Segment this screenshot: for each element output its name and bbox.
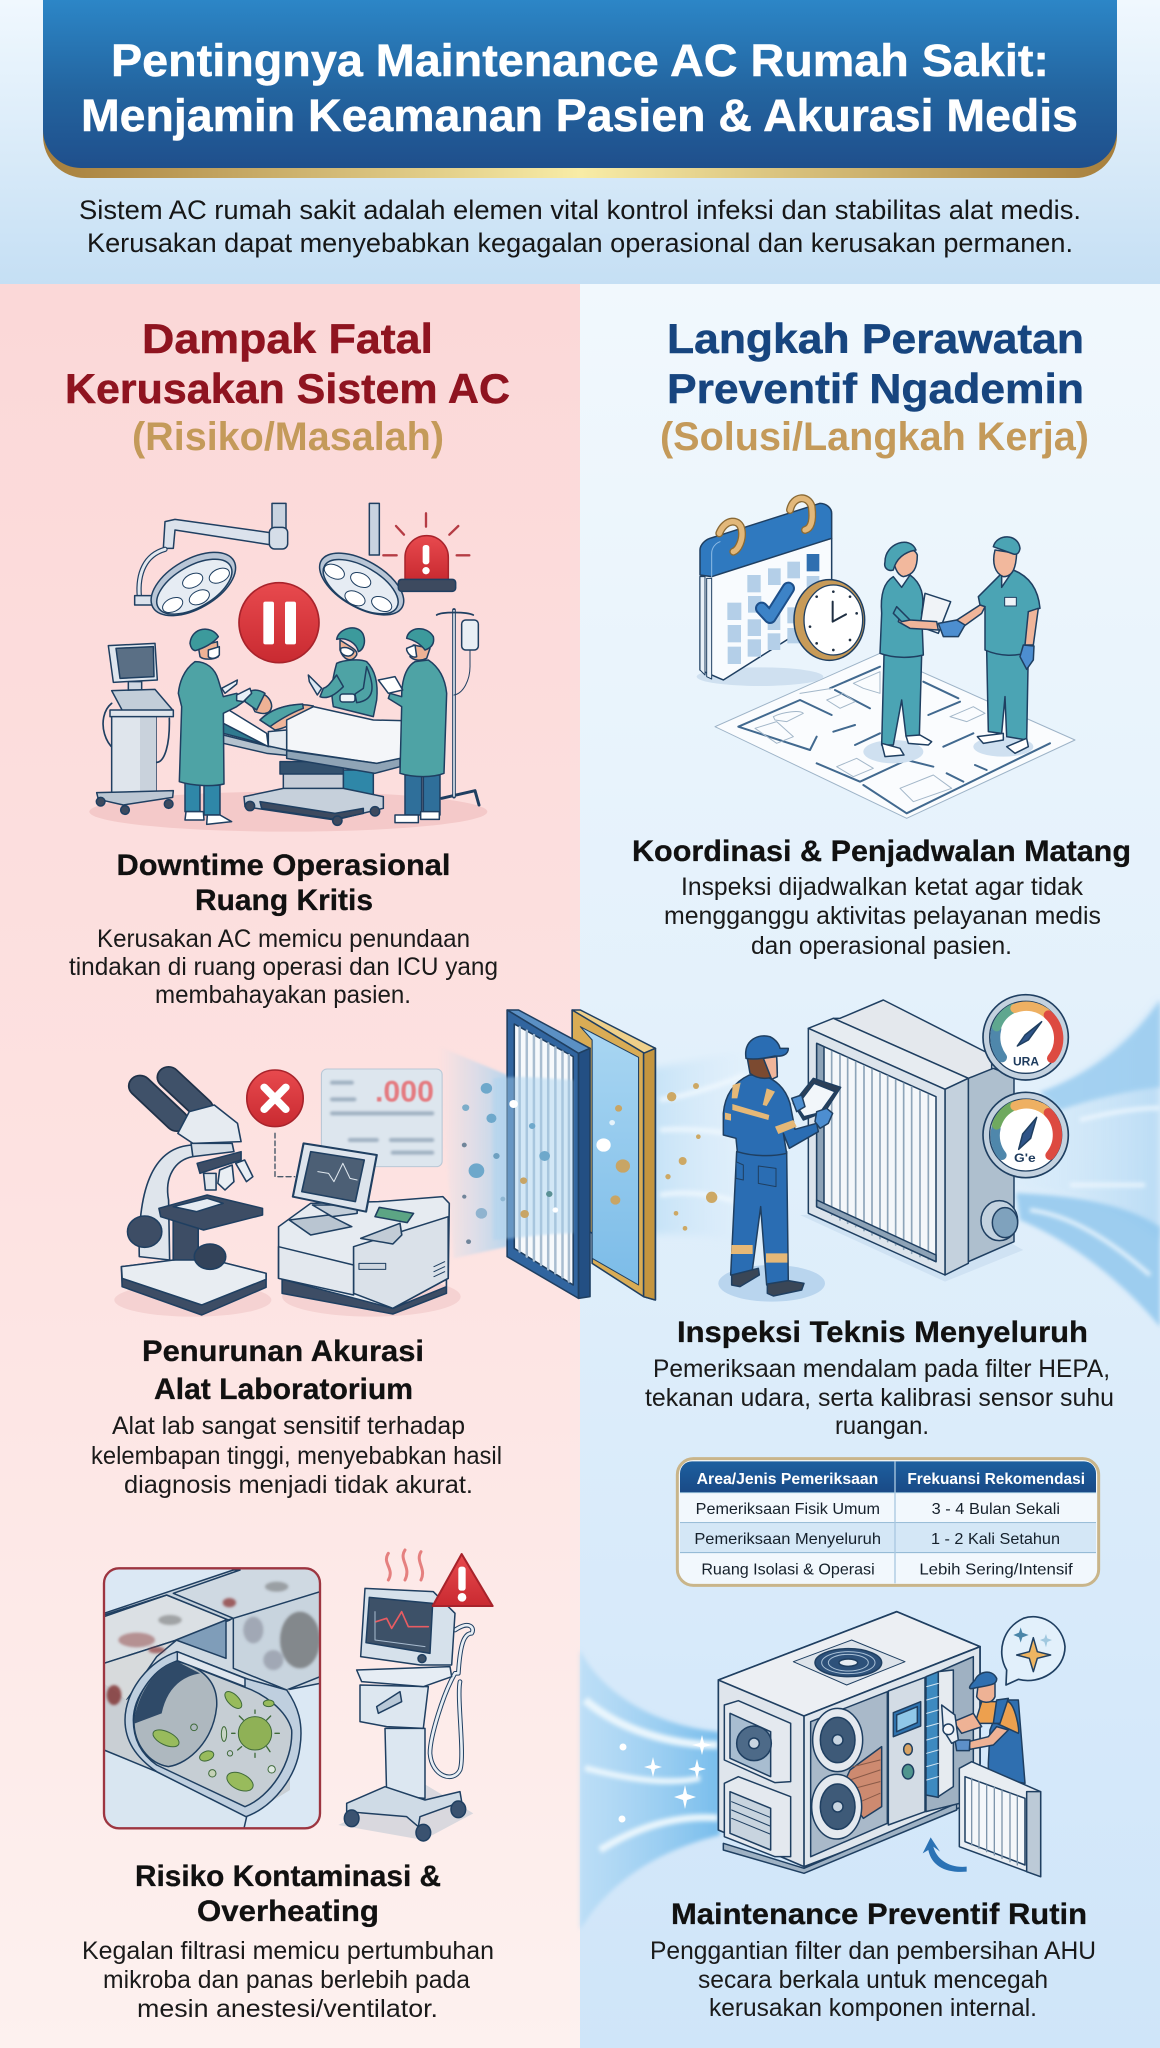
blue filter: [507, 1010, 590, 1053]
text: koordinasi: mengganggu aktivitas pelayanan medis: [664, 902, 1101, 930]
illustration: contaminated duct and overheating ventilator: [104, 1550, 493, 1841]
text: penurunan akurasi: Alat lab sangat sensitif terhadap: [112, 1412, 465, 1440]
particles: [462, 1083, 630, 1244]
AHU body: [718, 1612, 980, 1867]
illustration: microscope and lab analyzer: [114, 1069, 461, 1317]
gauges: URA: [1013, 1054, 1039, 1068]
heat waves: [386, 1550, 423, 1580]
clock: [794, 580, 865, 660]
table: frekuensi pemeriksaan: Frekuansi Rekomendasi: [907, 1471, 1085, 1488]
microscope: [121, 1257, 266, 1315]
IV stand: [442, 791, 479, 805]
illustration: central HEPA filters with particles: [439, 1010, 655, 1300]
right lamp: [369, 503, 379, 555]
alarm: [405, 536, 448, 580]
replace arrow: [923, 1837, 967, 1872]
text: downtime operasional: membahayakan pasien.: [155, 981, 411, 1009]
panel: langkah perawatan: [580, 284, 1160, 2048]
airflow swooshes: [580, 1000, 1160, 1930]
text: inspeksi teknis: ruangan.: [835, 1412, 929, 1440]
HEPA housing: [833, 1000, 992, 1078]
text: maintenance preventif: Maintenance Preventif Rutin: [671, 1898, 1087, 1931]
calendar: [697, 667, 823, 686]
surgeon center: [343, 770, 373, 795]
header background: [0, 0, 1160, 284]
text: penurunan akurasi: Alat Laboratorium: [154, 1373, 413, 1406]
heading: langkah perawatan: (Solusi/Langkah Kerja): [660, 415, 1089, 459]
table: frekuensi pemeriksaan: 1 - 2 Kali Setahun: [931, 1531, 1060, 1548]
text: risiko kontaminasi: mesin anestesi/ventilator.: [137, 1995, 438, 2023]
text: penurunan akurasi: [91, 1335, 502, 1499]
text: inspeksi teknis: Pemeriksaan mendalam pada filter HEPA,: [653, 1355, 1110, 1383]
text: koordinasi: [632, 835, 1131, 960]
control panel: [888, 1677, 925, 1825]
staff shadows: [863, 740, 923, 763]
illustration: scheduling and coordination: [697, 498, 1075, 818]
text: risiko kontaminasi: [82, 1860, 494, 2023]
patient: [247, 693, 272, 714]
text: risiko kontaminasi: mikroba dan panas berlebih pada: [103, 1966, 470, 1994]
worker: [988, 1700, 1025, 1783]
intro text: [79, 195, 1081, 258]
text: penurunan akurasi: Penurunan Akurasi: [142, 1335, 424, 1368]
heading: dampak fatal: [65, 315, 510, 459]
text: koordinasi: Inspeksi dijadwalkan ketat agar tidak: [681, 873, 1083, 901]
interior: [811, 1692, 887, 1857]
monitor: [312, 1205, 357, 1217]
text: koordinasi: dan operasional pasien.: [751, 932, 1012, 960]
table: frekuensi pemeriksaan: Area/Jenis Pemeriksaan: [697, 1471, 878, 1488]
gauges: [983, 995, 1068, 1080]
particles: [665, 1083, 717, 1231]
heading: dampak fatal: (Risiko/Masalah): [132, 415, 444, 459]
blurred results panel: .000: [375, 1076, 434, 1108]
table: frekuensi pemeriksaan: Lebih Sering/Intensif: [919, 1562, 1073, 1579]
replacement filter: [959, 1762, 1041, 1877]
duct card: [104, 1568, 320, 1828]
floor plan: [715, 653, 1075, 818]
side vents: [724, 1701, 791, 1783]
table: frekuensi pemeriksaan: [677, 1459, 1099, 1585]
gold filter: [572, 1010, 655, 1300]
illustration: operating room with pause: [89, 503, 487, 832]
doctor: [987, 650, 1028, 740]
X icon: [275, 1133, 295, 1177]
heading: langkah perawatan: Preventif Ngademin: [667, 365, 1084, 412]
text: inspeksi teknis: Inspeksi Teknis Menyeluruh: [677, 1316, 1088, 1349]
heading: dampak fatal: Kerusakan Sistem AC: [65, 365, 510, 412]
text: downtime operasional: Kerusakan AC memicu penundaan: [97, 925, 470, 953]
illustration: technician inspecting HEPA unit: G'e: [1014, 1151, 1036, 1165]
microbes: [150, 1689, 275, 1795]
text: downtime operasional: tindakan di ruang operasi dan ICU yang: [69, 953, 498, 981]
text: risiko kontaminasi: Overheating: [197, 1895, 379, 1928]
bed: [283, 773, 343, 797]
speech bubble: [1002, 1617, 1065, 1685]
anesthesia machine: [103, 703, 140, 755]
table: frekuensi pemeriksaan: Pemeriksaan Menyeluruh: [694, 1531, 881, 1548]
technician: [731, 1152, 788, 1285]
intro text: Kerusakan dapat menyebabkan kegagalan operasional dan kerusakan permanen.: [87, 228, 1073, 258]
panel: dampak fatal: [0, 284, 580, 2048]
heading: dampak fatal: Dampak Fatal: [142, 315, 433, 362]
pause icon: [239, 583, 319, 663]
left lamp arm: [272, 503, 286, 530]
surgeon right: [405, 775, 440, 815]
text: maintenance preventif: Penggantian filter dan pembersihan AHU: [650, 1937, 1096, 1965]
duct port: [981, 1201, 1018, 1241]
text: downtime operasional: Ruang Kritis: [195, 884, 373, 917]
roof fan: [793, 1640, 905, 1685]
heading: langkah perawatan: [660, 315, 1089, 459]
surgeon left: [185, 782, 220, 815]
text: penurunan akurasi: diagnosis menjadi tidak akurat.: [124, 1471, 473, 1499]
text: koordinasi: Koordinasi & Penjadwalan Matang: [632, 835, 1131, 868]
title banner: [43, 0, 1117, 178]
illustration: technician inspecting HEPA unit: [665, 995, 1068, 1302]
blurred results panel: [321, 1069, 442, 1167]
airflow beam: [439, 1047, 507, 1258]
text: downtime operasional: [69, 849, 498, 1009]
text: inspeksi teknis: tekanan udara, serta kalibrasi sensor suhu: [645, 1384, 1114, 1412]
analyzer: [282, 1278, 446, 1314]
table: frekuensi pemeriksaan: Ruang Isolasi & Operasi: [701, 1562, 875, 1579]
text: maintenance preventif: [650, 1898, 1096, 2022]
ventilator: [338, 1783, 473, 1840]
nurse: [882, 655, 922, 745]
title banner: Menjamin Keamanan Pasien & Akurasi Medis: [81, 90, 1078, 141]
intro text: Sistem AC rumah sakit adalah elemen vital kontrol infeksi dan stabilitas alat medis.: [79, 195, 1081, 225]
text: maintenance preventif: kerusakan komponen internal.: [709, 1994, 1037, 2022]
text: risiko kontaminasi: Risiko Kontaminasi &: [135, 1860, 441, 1893]
illustration: AHU maintenance: [718, 1612, 1065, 1877]
heading: langkah perawatan: Langkah Perawatan: [667, 315, 1084, 362]
text: maintenance preventif: secara berkala untuk mencegah: [698, 1966, 1048, 1994]
table: frekuensi pemeriksaan: 3 - 4 Bulan Sekali: [932, 1501, 1060, 1518]
text: inspeksi teknis: [645, 1316, 1114, 1440]
text: downtime operasional: Downtime Operasional: [116, 849, 450, 882]
text: risiko kontaminasi: Kegalan filtrasi memicu pertumbuhan: [82, 1937, 494, 1965]
text: penurunan akurasi: kelembapan tinggi, menyebabkan hasil: [91, 1442, 502, 1470]
table: frekuensi pemeriksaan: Pemeriksaan Fisik Umum: [696, 1501, 880, 1518]
title banner: Pentingnya Maintenance AC Rumah Sakit:: [111, 35, 1049, 86]
warning triangle: [433, 1554, 493, 1606]
